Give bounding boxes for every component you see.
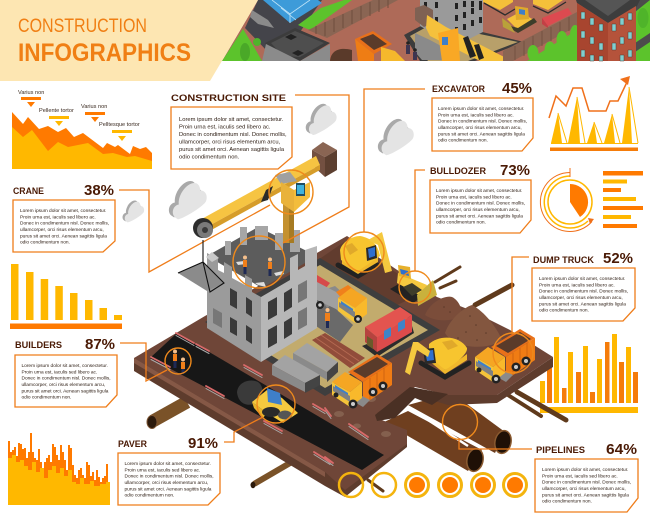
panel: excavator <box>432 80 533 151</box>
panel: excavator: Lorem ipsum dolor sit amet, consectetur. <box>438 106 524 112</box>
panel: construction site: Proin urna est, iaculis sed libero ac. <box>179 124 271 130</box>
panel: excavator: Proin urna est, iaculis sed libero ac. <box>438 112 514 118</box>
panel: crane: Donec in condimentum nisl. Donec mollis, <box>20 221 109 227</box>
panel: pipelines <box>535 441 638 512</box>
red cabin <box>362 307 414 357</box>
panel: crane: Proin urna est, iaculis sed libero ac. <box>20 214 96 220</box>
road roller <box>252 388 298 423</box>
panel: paver: Lorem ipsum dolor sit amet, consectetur. <box>124 461 211 467</box>
panel: excavator: 45% <box>502 80 532 97</box>
panel: builders <box>15 336 117 407</box>
panel: dump truck: Donec in condimentum nisl. Donec mollis, <box>539 289 628 295</box>
horizontal bar chart <box>603 171 643 228</box>
crane cabin <box>275 172 310 212</box>
bar chart right <box>540 334 638 413</box>
panel: dump truck: odio condimentum non. <box>539 308 589 314</box>
panel: pipelines: Donec in condimentum nisl. Donec mollis, <box>542 480 631 486</box>
title banner <box>0 0 258 81</box>
gauge chart <box>540 168 594 231</box>
road barriers <box>151 333 368 466</box>
construction yard <box>205 258 440 396</box>
top city illustration strip <box>222 0 650 61</box>
site platform <box>134 236 553 497</box>
grey building <box>420 0 483 46</box>
chart label 3: Varius non <box>81 104 107 110</box>
panel: paver: Donec in condimentum nisl. Donec mollis, <box>124 474 214 480</box>
panel: excavator: Donec in condimentum nisl. Donec mollis, <box>438 119 527 125</box>
panel: builders: Donec in condimentum nisl. Donec mollis, <box>22 376 111 382</box>
workers <box>173 256 330 374</box>
panel: crane: 38% <box>84 182 114 199</box>
title: infographics: INFOGRAPHICS <box>18 39 191 67</box>
panel: bulldozer: purus sit amet orci. Aenean sagittis ligula <box>436 213 523 219</box>
chart label 2: Pellente tortor <box>39 108 74 114</box>
soil piles <box>425 297 502 347</box>
panel: construction site: purus sit amet orci. Aenean sagittis ligula <box>179 147 285 153</box>
bottom circles <box>339 473 526 497</box>
roof slabs <box>236 261 284 287</box>
panel: construction site: Lorem ipsum dolor sit amet, consectetur. <box>179 117 284 123</box>
panel: pipelines: purus sit amet orci. Aenean sagittis ligula <box>542 492 629 498</box>
crane connector line <box>119 190 270 272</box>
panel: paver: Proin urna est, iaculis sed libero ac. <box>124 467 200 473</box>
panel: crane: odio condimentum non. <box>20 240 70 246</box>
panel: construction site: Donec in condimentum nisl. Donec mollis, <box>179 132 287 138</box>
panel: dump truck: Proin urna est, iaculis sed libero ac. <box>539 282 615 288</box>
excavator upper <box>338 232 392 276</box>
panel: paver: purus sit amet orci. Aenean sagittis ligula <box>124 486 212 492</box>
bulldozer <box>390 265 437 306</box>
large pipe back <box>408 393 505 453</box>
panel: bulldozer: odio condimentum non. <box>436 220 486 226</box>
panel: builders: 87% <box>85 336 115 353</box>
hanging platform <box>178 240 224 292</box>
panel: paver <box>118 435 220 505</box>
panel: pipelines: PIPELINES <box>536 445 585 456</box>
panel: builders: Lorem ipsum dolor sit amet, consectetur. <box>22 363 108 369</box>
excavator lower <box>405 338 469 377</box>
panel: bulldozer: Lorem ipsum dolor sit amet, consectetur. <box>436 188 522 194</box>
panel: crane: purus sit amet orci. Aenean sagittis ligula <box>20 233 107 239</box>
panel: pipelines: Proin urna est, iaculis sed libero ac. <box>542 473 618 479</box>
clouds <box>123 104 414 222</box>
panel: dump truck: Lorem ipsum dolor sit amet, consectetur. <box>539 276 625 282</box>
panel: dump truck: DUMP TRUCK <box>533 255 594 266</box>
panel: builders: ullamcorper, orci risus elementum arcu, <box>22 382 105 388</box>
brick building <box>576 0 640 23</box>
highlight circles <box>165 170 533 440</box>
descending bar chart <box>10 264 122 329</box>
connector lines <box>120 89 532 449</box>
panel: dump truck: 52% <box>603 250 633 267</box>
title: construction: CONSTRUCTION <box>18 16 147 37</box>
hook wheel <box>193 218 213 238</box>
dump truck front <box>332 354 392 408</box>
windows <box>230 288 292 348</box>
panel: bulldozer: ullamcorper, orci risus elementum arcu, <box>436 207 520 213</box>
back merlons <box>225 226 300 255</box>
panel: bulldozer: Proin urna est, iaculis sed libero ac. <box>436 194 512 200</box>
truck behind building <box>316 275 367 323</box>
panel: dump truck: ullamcorper, orci risus elementum arcu, <box>539 295 623 301</box>
concrete building <box>206 226 317 362</box>
panel: builders: odio condimentum non. <box>22 395 71 401</box>
panel: pipelines: odio condimentum non. <box>542 499 592 505</box>
panel: builders: BUILDERS <box>15 340 62 351</box>
panel: pipelines: 64% <box>606 441 637 458</box>
panel: bulldozer: Donec in condimentum nisl. Donec mollis, <box>436 201 525 207</box>
dump truck right <box>475 329 535 384</box>
panel: bulldozer: 73% <box>500 162 530 179</box>
panel: paver: PAVER <box>118 439 147 450</box>
panel: excavator: EXCAVATOR <box>432 84 485 95</box>
panel: paver: odio condimentum non. <box>124 493 174 499</box>
panel: construction site: ullamcorper, orci risus elementum arcu, <box>179 139 281 145</box>
panel: crane: ullamcorper, orci risus elementum arcu, <box>20 227 104 233</box>
panel: paver: ullamcorper, orci risus elementum arcu, <box>124 480 208 486</box>
panel: dump truck: purus sit amet orci. Aenean sagittis ligula <box>539 301 626 307</box>
panel: crane <box>13 182 115 252</box>
panel: crane: Lorem ipsum dolor sit amet, consectetur. <box>20 208 106 214</box>
panel: construction site: CONSTRUCTION SITE <box>171 93 286 104</box>
panel: builders: Proin urna est, iaculis sed libero ac. <box>22 369 97 375</box>
panel: excavator: ullamcorper, orci risus elementum arcu, <box>438 125 522 131</box>
panel: construction site: odio condimentum non. <box>179 154 240 160</box>
yard <box>404 20 524 61</box>
histogram chart <box>8 433 110 505</box>
pipes under the platform <box>147 267 566 491</box>
panel: construction site <box>171 93 292 169</box>
road right <box>635 0 650 61</box>
asphalt pile <box>237 380 262 405</box>
chart label 1: Varius non <box>18 90 44 96</box>
panel: paver: 91% <box>188 435 218 452</box>
area chart <box>12 90 152 169</box>
panel: bulldozer: BULLDOZER <box>430 166 486 177</box>
fence and lawn <box>503 12 577 61</box>
materials <box>272 343 338 393</box>
panel: builders: purus sit amet orci. Aenean sagittis ligula <box>22 388 109 394</box>
panel: excavator: odio condimentum non. <box>438 138 488 144</box>
panel: dump truck <box>532 250 635 321</box>
panel: excavator: purus sit amet orci. Aenean sagittis ligula <box>438 131 525 137</box>
panel: crane: CRANE <box>13 186 44 197</box>
triangle line chart <box>549 76 638 151</box>
chart label 4: Pelltesque tortor <box>99 122 140 128</box>
panel: bulldozer <box>430 162 531 233</box>
panel: pipelines: ullamcorper, orci risus elementum arcu, <box>542 486 626 492</box>
panel: pipelines: Lorem ipsum dolor sit amet, consectetur. <box>542 467 628 473</box>
crane arm <box>198 156 320 233</box>
large pipe front <box>384 411 482 471</box>
road <box>150 333 384 470</box>
counterweight <box>312 142 337 177</box>
crane <box>178 142 337 292</box>
